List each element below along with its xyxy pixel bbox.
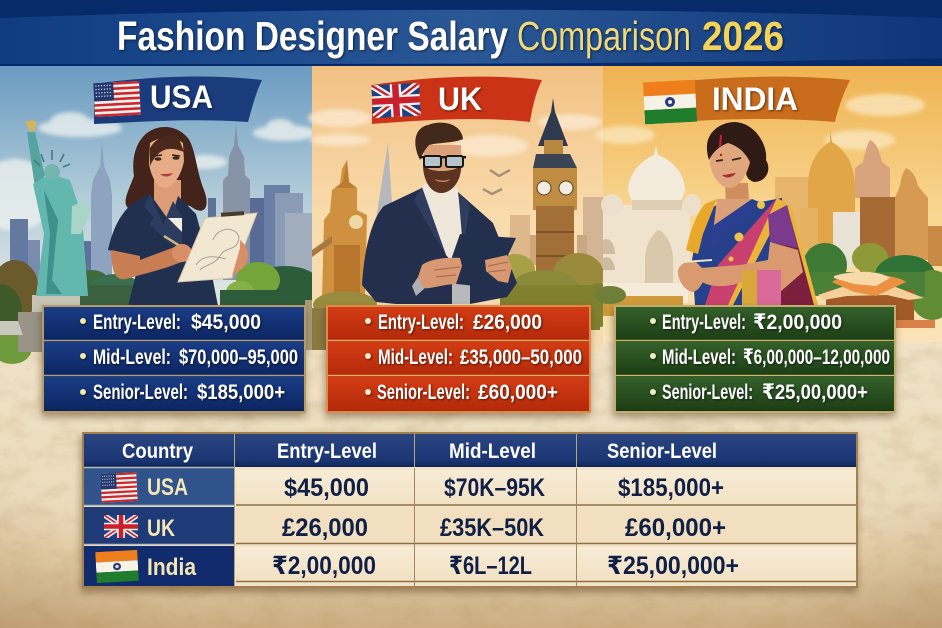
salary list: UK: [365, 310, 582, 404]
banner: USA: [93, 77, 262, 124]
trees: UK: [312, 253, 620, 350]
figure: man designer: [362, 123, 517, 304]
salary list: UK: Senior-Level:: [377, 380, 470, 404]
table values: ₹2,00,000: [272, 552, 376, 580]
title text: Comparison: [517, 13, 691, 59]
title text: 2026: [702, 13, 784, 59]
table values: $45,000: [284, 474, 369, 502]
salary list: USA: [80, 310, 298, 404]
icon: UK flag small: [104, 515, 138, 538]
salary list: India: Senior-Level:: [662, 380, 753, 404]
salary card: UK: [327, 306, 590, 412]
salary list: USA: Entry-Level:: [93, 310, 181, 334]
salary list: USA: $185,000+: [197, 380, 285, 404]
salary card: USA: [43, 306, 305, 412]
icon: birds: [483, 170, 510, 194]
table row headers: UK: [147, 515, 176, 542]
salary list: India: ₹25,00,000+: [762, 380, 868, 404]
salary list: UK: Entry-Level:: [378, 310, 464, 334]
table values: £60,000+: [625, 514, 726, 542]
table cells: [236, 468, 856, 586]
icon: Big Ben: [533, 98, 577, 278]
table header: Mid-Level: [449, 440, 536, 463]
salary list: UK: £60,000+: [478, 380, 558, 404]
table row headers: USA: [147, 474, 188, 501]
table values: £26,000: [282, 514, 368, 542]
trees: USA: [0, 260, 323, 364]
salary list: USA: $45,000: [191, 310, 261, 334]
icon: Tower Bridge: [312, 160, 367, 300]
table row headers: [84, 467, 234, 586]
clouds: USA: [0, 112, 317, 231]
skyline: USA: [10, 123, 312, 291]
salary list: India: Entry-Level:: [662, 310, 746, 334]
salary card: India: [615, 306, 895, 412]
salary list: USA: $70,000–95,000: [179, 345, 298, 369]
salary list: UK: £26,000: [473, 310, 542, 334]
trees: India: [803, 243, 942, 320]
skyline: India: [775, 130, 942, 272]
table values: $185,000+: [618, 474, 724, 502]
salary list: UK: Mid-Level:: [378, 345, 453, 369]
table values: ₹6L–12L: [449, 552, 532, 580]
salary list: USA: Mid-Level:: [93, 345, 171, 369]
icon: India flag: [643, 80, 697, 124]
icon: India flag small: [95, 550, 139, 583]
table row headers: India: [147, 554, 197, 581]
panel: USA scene: [0, 66, 323, 364]
label: USA: USA: [150, 79, 213, 115]
salary list: UK: £35,000–50,000: [460, 345, 582, 369]
clouds: UK: [308, 109, 602, 157]
salary list: India: ₹2,00,000: [753, 310, 842, 334]
table header: Senior-Level: [607, 440, 717, 463]
banner: India: [643, 77, 850, 124]
panel: UK scene: [308, 66, 620, 350]
clouds: India: [595, 94, 925, 150]
icon: US flag small: [100, 472, 138, 503]
figure: woman in sari: [678, 122, 818, 306]
pedestal: Statue of Liberty base: [0, 295, 80, 352]
skyline: UK: [369, 143, 603, 270]
table header: Entry-Level: [277, 440, 377, 463]
comparison table: [83, 433, 857, 587]
icon: UK flag: [371, 83, 421, 118]
table values: $70K–95K: [444, 474, 545, 502]
icon: US flag: [93, 81, 141, 117]
figure: woman designer: [108, 127, 257, 306]
table values: £35K–50K: [440, 514, 544, 542]
icon: pavilion: [818, 272, 935, 328]
salary list: USA: Senior-Level:: [93, 380, 188, 404]
panel: India scene: [594, 66, 942, 342]
table header: [84, 434, 856, 467]
table values: ₹25,00,000+: [607, 552, 739, 580]
title text: Fashion Designer Salary: [117, 13, 508, 59]
salary list: India: Mid-Level:: [662, 345, 736, 369]
banner: UK: [371, 77, 542, 124]
title bar: [0, 0, 942, 66]
icon: Statue of Liberty: [25, 120, 90, 296]
icon: Taj Mahal: [594, 145, 701, 316]
label: UK: UK: [438, 81, 482, 117]
table values: [272, 474, 739, 580]
table header: Country: [122, 440, 193, 463]
label: India: INDIA: [712, 81, 798, 117]
salary list: India: [650, 310, 890, 404]
